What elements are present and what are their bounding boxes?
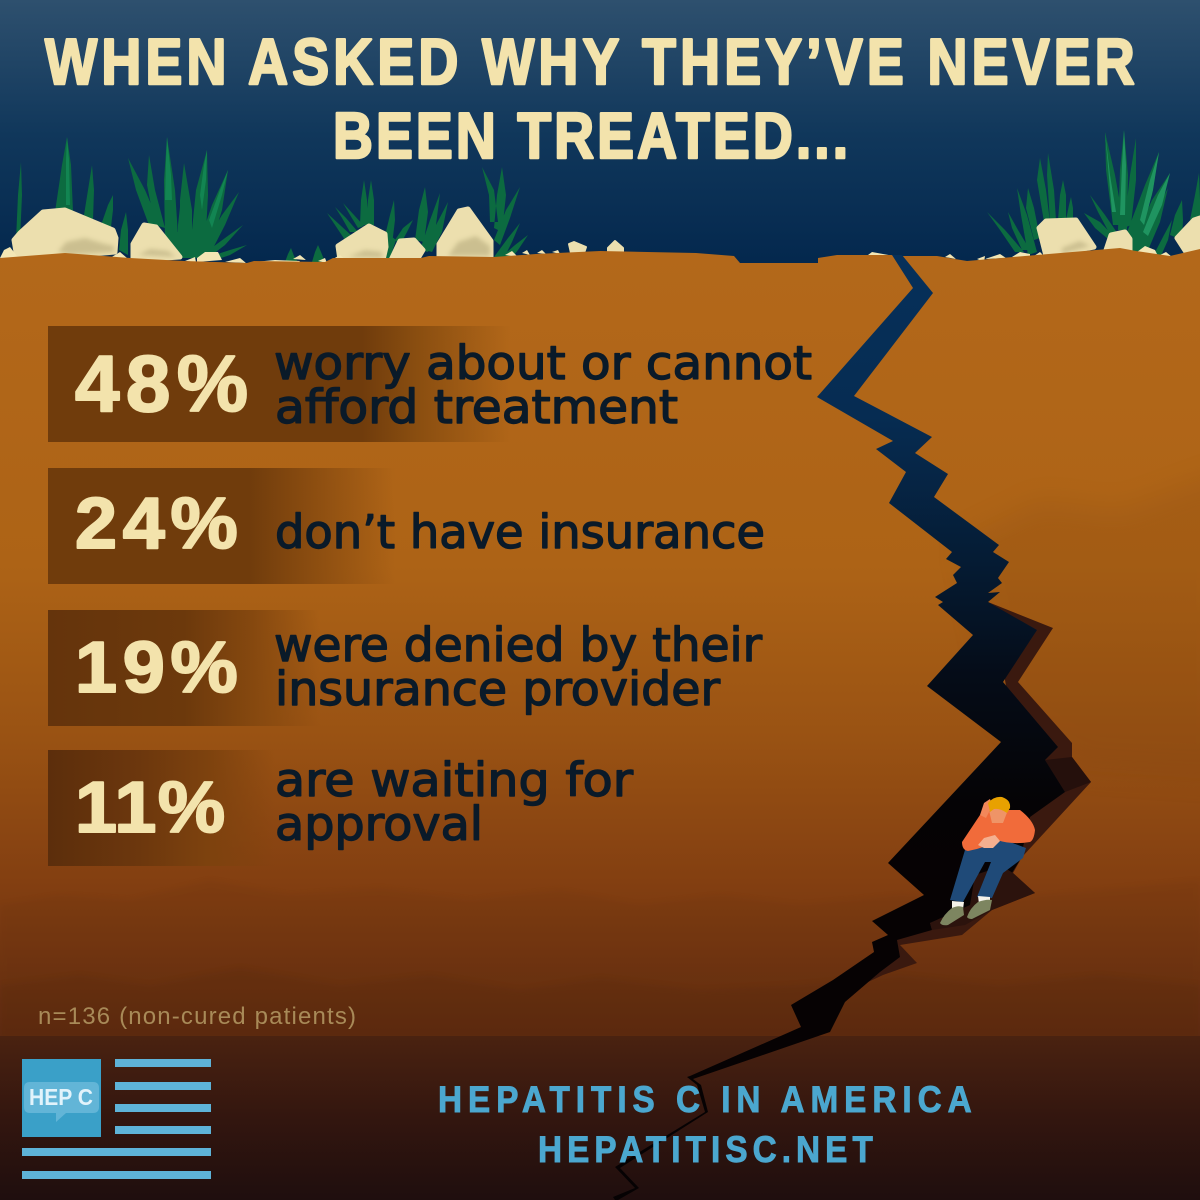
ground: [0, 248, 1200, 1200]
title: [45, 25, 1135, 172]
row 2 text: don’t have insurance: [275, 505, 765, 559]
person sitting in the crack: [940, 797, 1035, 925]
row 1 percent: 48%: [75, 339, 248, 428]
row 2 background: [48, 468, 395, 584]
title: BEEN TREATED...: [333, 99, 848, 172]
row 1 text: afford treatment: [275, 380, 678, 434]
crack shadow wall: [868, 602, 1091, 982]
resting hand: [978, 835, 1000, 848]
sky background: [0, 0, 1200, 270]
hair: [988, 797, 1010, 813]
ledge under the figure: [930, 866, 1035, 930]
crack opening: [613, 255, 1065, 1200]
title: WHEN ASKED WHY THEY’VE NEVER: [45, 25, 1135, 98]
row 3 text: [274, 618, 762, 716]
row 4 background: [48, 750, 275, 866]
lower dark ground band: [0, 1036, 1200, 1200]
row 1 text: [274, 336, 812, 434]
row 1 text: worry about or cannot: [274, 336, 812, 390]
crack in the ground: [613, 255, 1091, 1200]
row 4 percent: 11%: [75, 767, 225, 848]
sample size note: n=136 (non-cured patients): [38, 1003, 356, 1030]
footer text: [438, 1079, 972, 1170]
row 3 background: [48, 610, 320, 726]
face: [988, 806, 1008, 823]
grass clusters: [16, 130, 1200, 262]
row 2 percent: 24%: [75, 483, 238, 564]
row 3 text: insurance provider: [275, 662, 720, 716]
row 3 percent: 19%: [75, 627, 238, 708]
ground texture layers: [202, 494, 1200, 982]
row 4 text: are waiting for: [275, 753, 633, 807]
rocks: [0, 209, 1200, 264]
footer text: HEPATITISC.NET: [538, 1129, 873, 1170]
raised hand: [980, 799, 992, 818]
logo: Hep C flag: [22, 1059, 211, 1179]
row 4 text: [275, 753, 633, 851]
sweater: [962, 810, 1035, 851]
row 3 text: were denied by their: [274, 618, 762, 672]
socks: [952, 896, 990, 909]
row 1 background: [48, 326, 510, 442]
logo: Hep C flag: HEP C: [29, 1084, 93, 1110]
row 4 text: approval: [275, 797, 483, 851]
shoes: [940, 900, 992, 925]
trousers: [950, 840, 1026, 902]
footer text: HEPATITIS C IN AMERICA: [438, 1079, 972, 1120]
